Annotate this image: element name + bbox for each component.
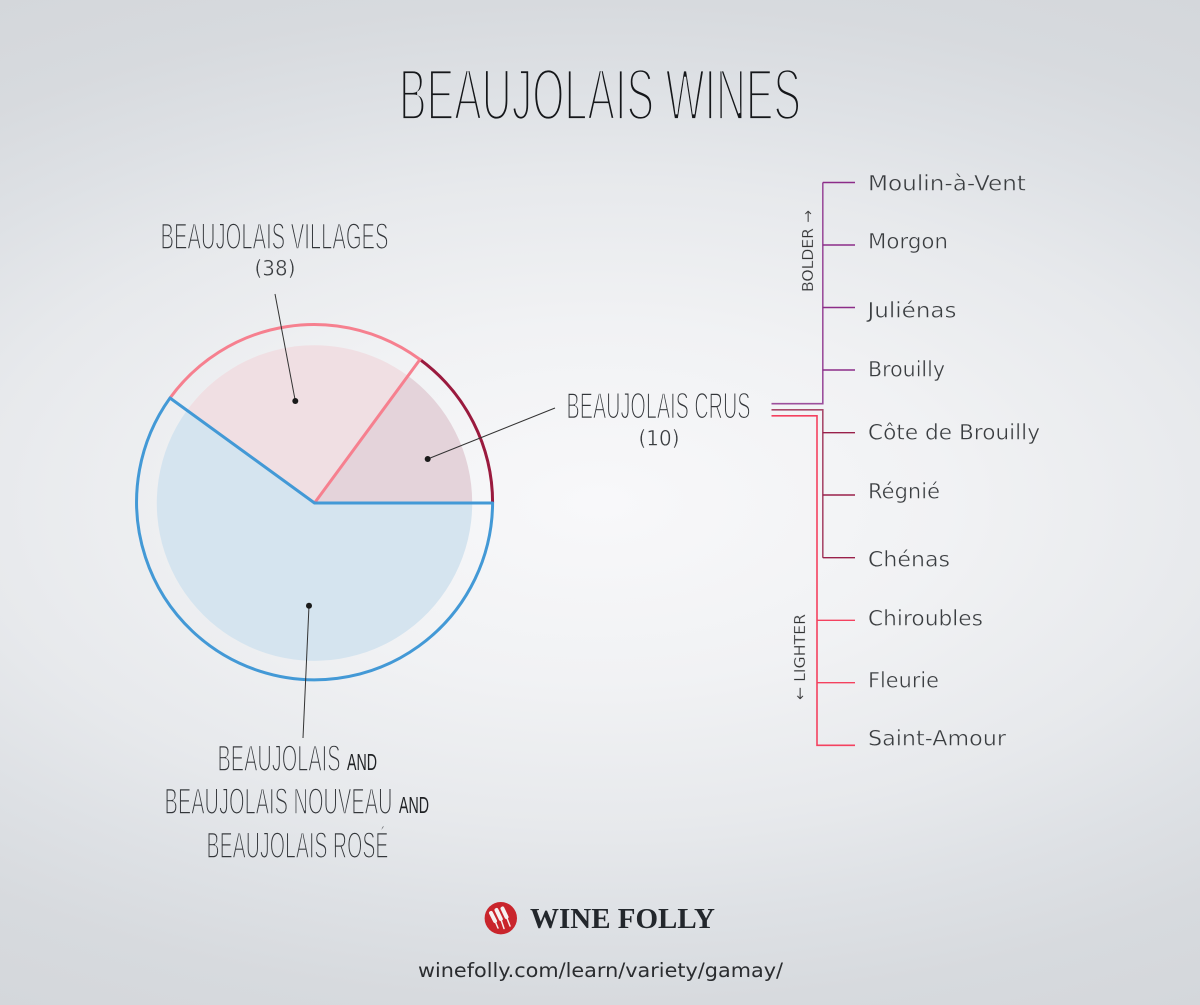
tree: middle branch: [772, 410, 855, 558]
label: Beaujolais Crus: [566, 386, 750, 450]
leader: Villages: [275, 294, 298, 404]
cru list: Brouilly: [868, 358, 945, 382]
cru list: Côte de Brouilly: [868, 420, 1040, 444]
cru list: [865, 172, 1040, 750]
segment: Beaujolais fill: [157, 411, 472, 661]
label: Beaujolais, Nouveau and Rosé: BEAUJOLAIS NOUVEAU: [164, 781, 392, 822]
tree: lighter branch: [772, 416, 855, 745]
cru list: Fleurie: [868, 668, 939, 692]
title: BEAUJOLAIS WINES: [399, 53, 801, 136]
label: Beaujolais Crus: (10): [638, 426, 680, 450]
cru list: Morgon: [868, 230, 948, 254]
label: Beaujolais, Nouveau and Rosé: BEAUJOLAIS ROSÉ: [206, 825, 388, 866]
icon: wine folly logo: [485, 902, 517, 934]
arc and radius: Villages: [170, 325, 420, 503]
leader: Beaujolais: [303, 603, 312, 738]
axis label: bolder: BOLDER →: [799, 210, 817, 292]
label: Beaujolais, Nouveau and Rosé: AND: [399, 792, 429, 818]
logo wordmark: WINE FOLLY: [530, 903, 715, 935]
label: Beaujolais, Nouveau and Rosé: AND: [347, 749, 377, 775]
label: Beaujolais Crus: BEAUJOLAIS CRUS: [566, 386, 750, 427]
cru list: Chénas: [868, 548, 950, 572]
label: Beaujolais Villages: [160, 216, 388, 280]
pie chart: [137, 325, 493, 680]
cru list: Régnié: [868, 480, 940, 504]
cru list: Chiroubles: [868, 606, 983, 630]
segment: Villages fill: [186, 345, 408, 503]
cru list: Juliénas: [865, 298, 956, 322]
cru list: Saint-Amour: [868, 726, 1006, 750]
label: Beaujolais, Nouveau and Rosé: [164, 738, 429, 866]
arc and radius: Beaujolais: [137, 398, 493, 680]
source url: winefolly.com/learn/variety/gamay/: [418, 959, 783, 982]
arc: Crus: [420, 360, 493, 503]
label: Beaujolais, Nouveau and Rosé: BEAUJOLAIS: [218, 738, 340, 779]
leader: Crus: [425, 408, 555, 462]
axis label: lighter: ← LIGHTER: [791, 614, 809, 700]
tree: bolder branch: [772, 182, 855, 404]
cru list: Moulin-à-Vent: [868, 172, 1026, 196]
label: Beaujolais Villages: (38): [254, 256, 296, 280]
label: Beaujolais Villages: BEAUJOLAIS VILLAGES: [160, 216, 388, 257]
segment: Crus fill: [314, 376, 472, 503]
